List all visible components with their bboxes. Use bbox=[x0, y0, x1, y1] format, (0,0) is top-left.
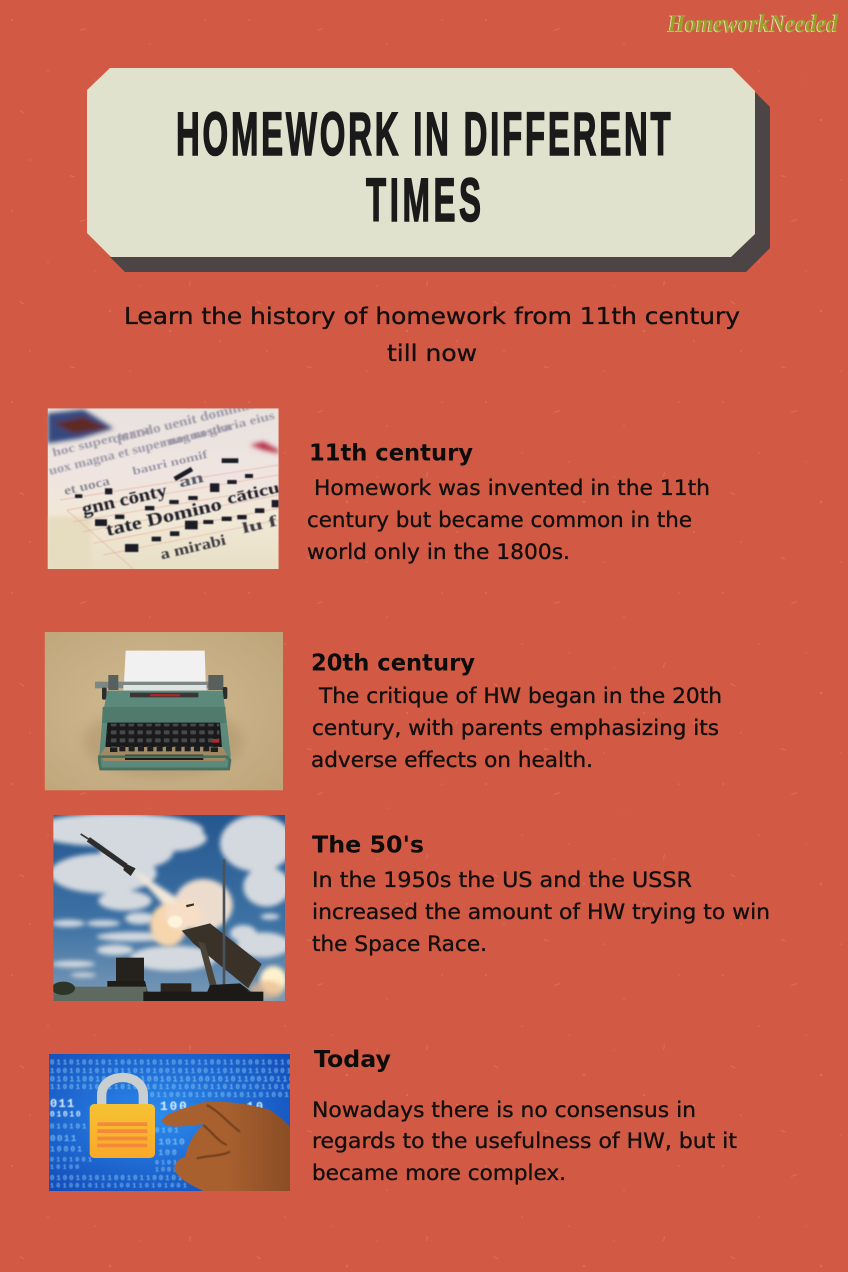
20th century text: 20th century bbox=[311, 650, 475, 676]
binary digits: 0101001 bbox=[50, 1156, 94, 1164]
hand bbox=[162, 1102, 290, 1191]
photo: missile launch bbox=[53, 815, 285, 1001]
photo: medieval manuscript bbox=[47, 396, 281, 569]
smoke plume bbox=[134, 872, 233, 947]
title text bbox=[176, 101, 671, 235]
Today text: became more complex. bbox=[312, 1161, 566, 1185]
banner plate bbox=[87, 68, 755, 257]
title text: HOMEWORK IN DIFFERENT bbox=[176, 101, 671, 169]
photo: medieval manuscript: tate Domino bbox=[104, 494, 224, 540]
binary digits: 0100101011001011001010011011 bbox=[50, 1175, 229, 1183]
title banner bbox=[87, 68, 770, 272]
binary digits: 0011 bbox=[50, 1133, 78, 1144]
keyboard bbox=[105, 723, 222, 748]
binary digits: 0101 bbox=[155, 1127, 181, 1135]
Today text bbox=[312, 1047, 737, 1185]
launcher bbox=[182, 923, 262, 988]
photo: medieval manuscript: a mirabi bbox=[159, 531, 228, 563]
photo: padlock and hand: 100 bbox=[160, 1099, 189, 1114]
rocket exhaust bbox=[260, 966, 287, 994]
shackle bbox=[102, 1077, 143, 1107]
binary digits: 10100 bbox=[50, 1163, 82, 1171]
photo: medieval manuscript: uox magna et super nos nostra bbox=[47, 419, 233, 478]
binary digits: 010101 bbox=[50, 1123, 88, 1131]
20th century text bbox=[311, 650, 722, 772]
subtitle: till now bbox=[387, 341, 477, 367]
photo: padlock and hand bbox=[49, 1054, 316, 1191]
Today text: Nowadays there is no consensus in bbox=[312, 1098, 696, 1122]
banner shadow bbox=[110, 92, 770, 272]
11th century text: 11th century bbox=[309, 440, 473, 466]
11th century text: Homework was invented in the 11th bbox=[314, 476, 710, 500]
binary digits bbox=[50, 1059, 290, 1188]
photo: typewriter bbox=[45, 632, 283, 790]
photo: medieval manuscript: magna gloria eius bbox=[161, 408, 276, 450]
photo: medieval manuscript: gnn cōnty bbox=[80, 480, 169, 519]
50's text: the Space Race. bbox=[312, 932, 487, 956]
20th century text: century, with parents emphasizing its bbox=[312, 716, 719, 740]
photo: medieval manuscript: et uoca bbox=[63, 474, 112, 498]
paper bbox=[124, 650, 206, 682]
photo: medieval manuscript: lu f bbox=[240, 512, 280, 537]
20th century text: The critique of HW began in the 20th bbox=[318, 684, 722, 708]
11th century text: world only in the 1800s. bbox=[307, 540, 570, 564]
photo: padlock and hand: 011 bbox=[50, 1097, 76, 1111]
photo: medieval manuscript: an bbox=[177, 469, 206, 491]
binary digits: 01100101101001011010011001 bbox=[150, 1092, 316, 1100]
binary digits: 1010010110100110101001 bbox=[50, 1182, 189, 1190]
50's text: increased the amount of HW trying to win bbox=[312, 900, 770, 924]
subtitle: Learn the history of homework from 11th century bbox=[124, 304, 740, 330]
photo: padlock and hand: 10 bbox=[247, 1100, 265, 1114]
50's text: The 50's bbox=[312, 832, 424, 858]
title text: TIMES bbox=[366, 167, 481, 235]
subtitle bbox=[124, 304, 740, 367]
binary digits: 01011001010110100101101001010110010110 bbox=[50, 1076, 295, 1085]
photo: medieval manuscript: cāticu bbox=[225, 479, 281, 508]
photo: medieval manuscript: quando uenit dominus bbox=[110, 396, 256, 446]
photo: medieval manuscript: bauri nomif bbox=[131, 449, 209, 478]
Today text: Today bbox=[314, 1047, 391, 1073]
binary digits: 10001 bbox=[50, 1146, 84, 1155]
binary digits: 0101 bbox=[155, 1158, 179, 1166]
11th century text: century but became common in the bbox=[307, 508, 692, 532]
binary digits: 1001 bbox=[155, 1166, 179, 1174]
lock body bbox=[90, 1104, 155, 1158]
binary digits: 11001010011010010110100101101001011010 bbox=[50, 1084, 293, 1092]
photo: medieval manuscript: hoc super terra bbox=[51, 422, 151, 460]
missile bbox=[81, 834, 136, 876]
binary digits: 1010 bbox=[158, 1136, 186, 1147]
vehicles and ground bbox=[116, 958, 144, 982]
11th century text bbox=[307, 440, 710, 564]
binary digits: 100 bbox=[158, 1149, 179, 1158]
photo: padlock and hand: 01010 bbox=[50, 1111, 82, 1120]
body bbox=[99, 691, 231, 769]
binary digits: 10010110100110101001011001101001101001 bbox=[50, 1068, 293, 1076]
50's text bbox=[312, 832, 770, 956]
20th century text: adverse effects on health. bbox=[311, 748, 593, 772]
50's text: In the 1950s the US and the USSR bbox=[312, 868, 692, 892]
carriage bbox=[95, 682, 223, 688]
Today text: regards to the usefulness of HW, but it bbox=[312, 1129, 737, 1153]
binary digits: 01101001011001010110010110011010010110 bbox=[50, 1059, 293, 1067]
